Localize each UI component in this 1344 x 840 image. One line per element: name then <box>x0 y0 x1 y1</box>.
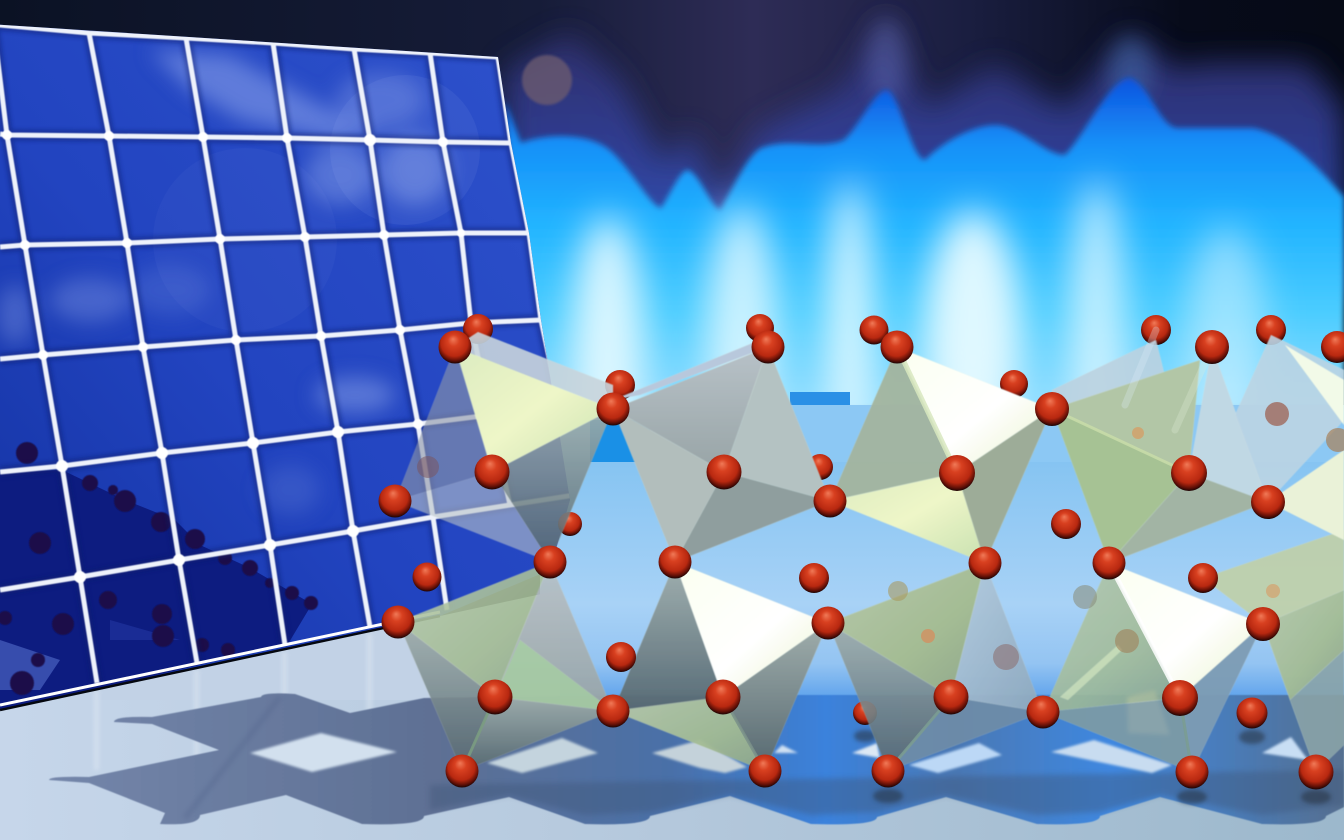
backdrop: blue patches and pale reflective wall behind the crystal <box>540 392 1344 720</box>
crystal: upper octahedra row <box>395 332 1344 563</box>
floor shadow: sphere contact shadows <box>854 730 1331 804</box>
octahedron upper 2 <box>613 340 830 562</box>
floor shadow of the crystal <box>49 690 1344 824</box>
floor: pale block below crystal <box>1127 690 1170 735</box>
octahedron lower 3 <box>828 563 1043 771</box>
octahedron lower 5 <box>1203 530 1344 772</box>
solar panel <box>0 24 575 712</box>
flames: pale vertical light columns <box>572 180 1266 465</box>
octahedron lower 1 <box>398 562 613 771</box>
panel: glowing grid intersections <box>2 130 475 583</box>
floor shadow: crossing darker stripe <box>185 697 280 818</box>
crystal: front spheres <box>378 330 1344 790</box>
octahedron upper 3 <box>830 347 1052 563</box>
octahedron lower 4 <box>1043 563 1263 772</box>
panel surface <box>0 24 570 710</box>
decoration: dim lens orb <box>522 55 572 105</box>
panel: bottom white edge and black frame <box>0 612 440 710</box>
crystal: lower octahedra row <box>398 530 1344 772</box>
floor <box>0 590 1344 840</box>
panel: reflected clouds and lens flare <box>0 24 575 712</box>
floor: faint reflections of the panel grid <box>94 634 372 770</box>
crystal: floating pale highlights <box>417 402 1344 670</box>
glow: dim outer flame halo <box>505 12 1344 300</box>
octahedron upper 4 <box>1052 340 1268 563</box>
floor shadow: darker lower band <box>430 770 1344 815</box>
panel: crystal reflection <box>0 442 318 712</box>
flames: saturated blue body <box>505 78 1344 410</box>
octahedron upper 1 <box>395 332 613 562</box>
octahedron upper 5 <box>1235 335 1344 540</box>
glow: pale tips above the flame peaks <box>867 18 1152 108</box>
octahedron lower 2 <box>613 562 828 771</box>
floor shadow: light diamonds <box>250 733 1308 773</box>
panel: white grid lines <box>0 24 575 683</box>
crystal: bonds between atoms <box>462 330 1212 772</box>
crystal: back spheres <box>463 314 1286 725</box>
